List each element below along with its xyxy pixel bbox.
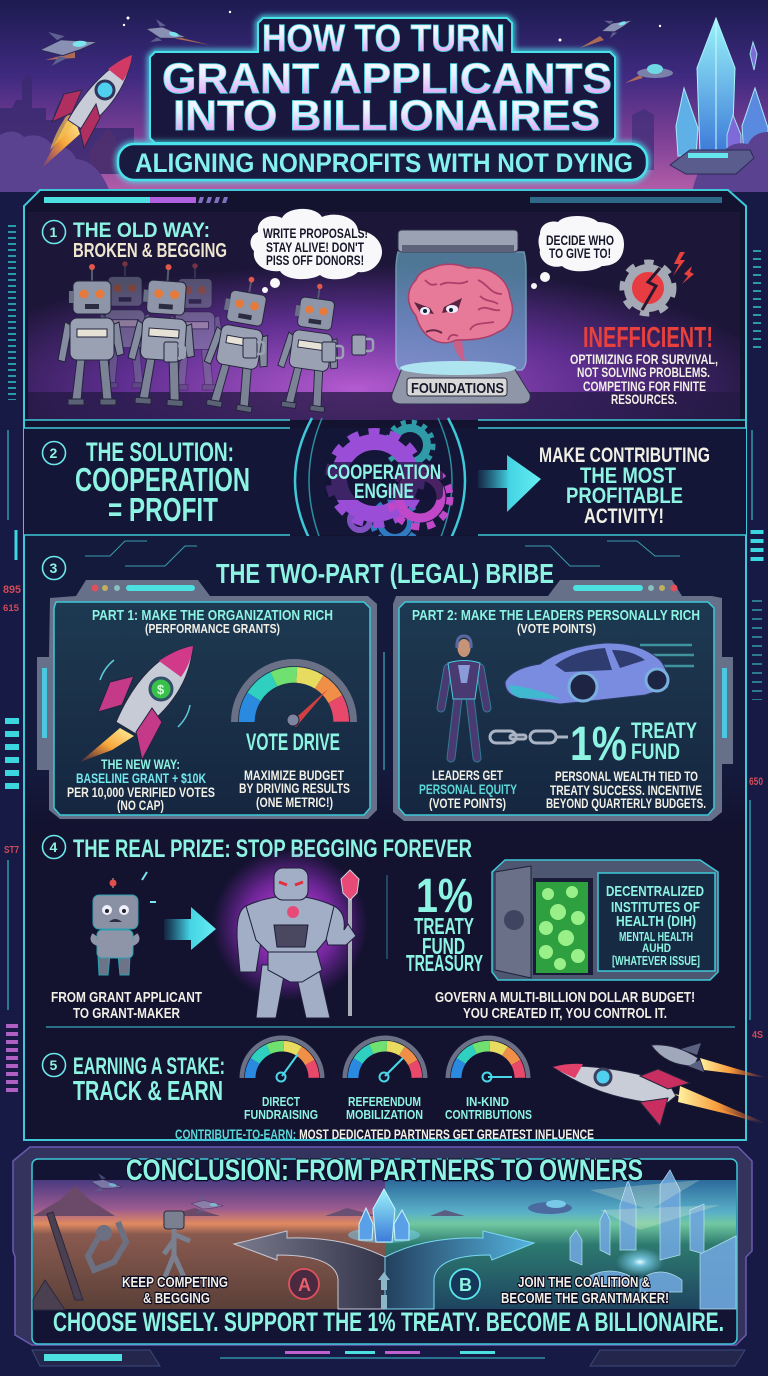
heading: the old way: THE OLD WAY:: [73, 219, 210, 242]
heading: track and earn: EARNING A STAKE:: [73, 1053, 225, 1080]
panel: section 4 real prize: [42, 835, 718, 1022]
header scene: sky, city, ships, crystals: [0, 0, 768, 192]
heading: two-part legal bribe: 3: [50, 560, 58, 576]
title: [150, 18, 615, 143]
heading: track and earn: [42, 1053, 225, 1106]
icon: open safe with money: [WHATEVER ISSUE]: [612, 954, 700, 968]
chart: in-kind contributions gauge: IN-KIND: [466, 1094, 509, 1109]
text: make contributing: THE MOST: [580, 463, 676, 488]
cloud right: [692, 132, 768, 192]
side HUD decorations: 650: [749, 776, 763, 788]
text: personal wealth: [546, 768, 706, 811]
text: maximize budget: [239, 767, 350, 810]
panel: section 1 the old way: [24, 209, 746, 420]
text: govern a budget: [435, 990, 695, 1022]
text: contribute to earn: CONTRIBUTE-TO-EARN: MOST DEDICATED PARTNERS GET GREATEST INFLUENCE: [175, 1126, 594, 1142]
chart: in-kind contributions gauge: [445, 1038, 532, 1122]
heading: stop begging: 4: [50, 839, 58, 855]
text: keep competing: [122, 1274, 228, 1307]
chart: direct fundraising gauge: FUNDRAISING: [244, 1107, 318, 1122]
arrow: path B right: [385, 1231, 534, 1309]
thought bubble: decide who to give to: DECIDE WHO: [546, 232, 614, 248]
heading: the old way: [42, 219, 227, 262]
side HUD decorations: 4S: [752, 1030, 763, 1041]
panel: section 4 real prize: TO GRANT-MAKER: [73, 1006, 180, 1022]
icon: open safe with money: MENTAL HEALTH: [619, 930, 693, 944]
arrow: to most profitable: [478, 455, 541, 512]
text: join the coalition: [501, 1274, 669, 1307]
heading: two-part legal bribe: THE TWO-PART (LEGAL) BRIBE: [216, 558, 554, 589]
chart: referendum mobilization gauge: REFERENDUM: [348, 1094, 421, 1109]
panel: section 3 bribe: [25, 536, 745, 830]
panel: part 1 organization: PART 1: MAKE THE ORGANIZATION RICH: [92, 607, 333, 624]
stat: 1% treaty fund treasury: TREATY: [414, 913, 474, 939]
chart: referendum mobilization gauge: MOBILIZATION: [346, 1107, 423, 1122]
text: join the coalition: BECOME THE GRANTMAKER!: [501, 1290, 669, 1307]
icon: broken gear: [623, 252, 694, 313]
side HUD decorations: 615: [3, 603, 19, 613]
badge: B: [450, 1269, 480, 1299]
icon: open safe with money: INSTITUTES OF: [611, 899, 700, 916]
main frame panel: [24, 190, 746, 1140]
panel: part 1 organization: (PERFORMANCE GRANTS): [145, 621, 280, 636]
icon: header rocket: [42, 55, 132, 168]
text: personal wealth: PERSONAL WEALTH TIED TO: [555, 768, 698, 784]
center road marker: [378, 1272, 390, 1309]
title: INTO BILLIONAIRES: [173, 92, 600, 140]
icon: worried small robot: [93, 872, 156, 975]
icon: dollar rocket: $: [157, 682, 165, 697]
title: HOW TO TURN: [262, 18, 505, 60]
icon: cooperation engine gears: COOPERATION: [327, 461, 441, 484]
footer HUD bars: [32, 1350, 745, 1366]
text: make contributing: MAKE CONTRIBUTING: [539, 444, 710, 467]
chart: vote drive gauge: [234, 662, 354, 756]
stat: 1% treaty fund treasury: [406, 870, 483, 976]
chart: vote drive gauge: VOTE DRIVE: [246, 729, 340, 756]
badge: B: B: [459, 1275, 472, 1295]
brain: [408, 264, 512, 368]
subtitle pill: ALIGNING NONPROFITS WITH NOT DYING: [135, 148, 633, 178]
text: maximize budget: (ONE METRIC!): [256, 794, 333, 810]
icon: cooperation engine gears: ENGINE: [354, 480, 414, 503]
thought bubble: write proposals: PISS OFF DONORS!: [266, 252, 364, 268]
thought bubble: write proposals: STAY ALIVE! DON'T: [266, 239, 364, 255]
chart: direct fundraising gauge: [242, 1038, 322, 1122]
heading: cooperation equals profit: COOPERATION: [75, 461, 250, 498]
chart: referendum mobilization gauge: [345, 1038, 425, 1122]
panel: conclusion: [13, 1147, 752, 1345]
stat: 1% treaty fund treasury: FUND: [422, 933, 465, 959]
thought bubble: write proposals: WRITE PROPOSALS!: [263, 225, 368, 241]
text: govern a budget: YOU CREATED IT, YOU CONTROL IT.: [463, 1006, 667, 1022]
heading: cooperation equals profit: THE SOLUTION:: [86, 437, 234, 467]
badge: A: [289, 1269, 319, 1299]
panel: part 1 organization: [37, 580, 384, 819]
stat: 1% treaty fund: FUND: [631, 739, 680, 764]
jar with brain: foundations: [392, 230, 530, 404]
thought bubble: decide who to give to: [531, 216, 624, 289]
callout: inefficient: NOT SOLVING PROBLEMS.: [577, 364, 710, 380]
callout: inefficient: RESOURCES.: [611, 391, 677, 407]
text: maximize budget: BY DRIVING RESULTS: [239, 780, 350, 796]
icon: open safe with money: [492, 860, 718, 980]
text: leaders get equity: (VOTE POINTS): [429, 795, 506, 811]
callout: inefficient: [570, 322, 718, 407]
panel: part 2 leaders: (VOTE POINTS): [517, 621, 596, 636]
icon: dollar rocket: [80, 646, 193, 762]
icon: sports car: [505, 643, 694, 704]
chart: in-kind contributions gauge: CONTRIBUTIONS: [445, 1107, 532, 1122]
city: [570, 1170, 736, 1309]
heading: two-part legal bribe: [42, 556, 554, 589]
stat: 1% treaty fund: 1%: [570, 718, 627, 771]
text: keep competing: KEEP COMPETING: [122, 1274, 228, 1291]
side HUD decorations: [3, 225, 763, 1096]
text: leaders get equity: [419, 767, 517, 811]
icon: powerful robot with staff: [212, 849, 368, 1018]
robots queue with mugs: [58, 261, 373, 414]
thought bubble: write proposals: [251, 209, 382, 293]
panel: part 2 leaders: PART 2: MAKE THE LEADERS PERSONALLY RICH: [412, 607, 700, 624]
jar with brain: foundations: FOUNDATIONS: [411, 380, 504, 397]
arrow: path A left: [234, 1231, 385, 1309]
arrow: applicant to grant-maker: [164, 907, 216, 950]
side HUD decorations: 895: [3, 584, 21, 596]
badge: A: A: [298, 1275, 311, 1295]
text: make contributing: ACTIVITY!: [584, 505, 664, 528]
text: the new way: PER 10,000 VERIFIED VOTES: [67, 784, 215, 800]
panel: part 2 leaders: [393, 580, 733, 821]
text: personal wealth: TREATY SUCCESS. INCENTIVE: [550, 782, 702, 798]
heading: the old way: 1: [50, 224, 58, 240]
text: the new way: [67, 756, 215, 813]
cloud left: [0, 131, 110, 192]
icon: open safe with money: DECENTRALIZED: [606, 883, 704, 900]
text: maximize budget: MAXIMIZE BUDGET: [244, 767, 344, 783]
text: the new way: (NO CAP): [117, 797, 164, 813]
text: the new way: BASELINE GRANT + $10K: [76, 770, 206, 786]
heading: cooperation equals profit: 2: [50, 445, 58, 461]
text: make contributing: [539, 444, 710, 528]
heading: cooperation equals profit: = PROFIT: [108, 491, 218, 528]
text: leaders get equity: PERSONAL EQUITY: [419, 781, 517, 797]
side HUD decorations: ST7: [4, 845, 19, 856]
title: GRANT APPLICANTS: [162, 55, 612, 103]
text: the new way: THE NEW WAY:: [101, 756, 180, 772]
icon: leader in suit: [441, 636, 487, 758]
icon: open safe with money: AUHD: [642, 941, 671, 955]
callout: inefficient: INEFFICIENT!: [583, 322, 713, 354]
panel: section 2 the solution: [24, 418, 746, 544]
text: leaders get equity: LEADERS GET: [432, 767, 503, 783]
icon: cooperation engine gears: [295, 418, 465, 544]
callout: inefficient: OPTIMIZING FOR SURVIVAL,: [570, 351, 718, 367]
stat: 1% treaty fund treasury: TREASURY: [406, 950, 483, 976]
heading: cooperation equals profit: [42, 437, 250, 528]
panel: section 5 earning a stake: [42, 1038, 768, 1142]
chart: direct fundraising gauge: DIRECT: [262, 1094, 300, 1109]
conclusion scene: wasteland and city: [33, 1170, 736, 1310]
broken robots: [88, 1211, 190, 1277]
heading: the old way: BROKEN & BEGGING: [73, 240, 227, 262]
text: personal wealth: BEYOND QUARTERLY BUDGETS.: [546, 795, 706, 811]
text: keep competing: & BEGGING: [143, 1290, 210, 1307]
thought bubble: decide who to give to: TO GIVE TO!: [549, 245, 611, 261]
heading: track and earn: 5: [50, 1057, 58, 1073]
icon: open safe with money: HEALTH (DIH): [616, 913, 696, 930]
icon: flying rockets: [553, 1043, 768, 1126]
crystal: [348, 1189, 420, 1243]
panel: section 4 real prize: FROM GRANT APPLICANT: [51, 990, 202, 1006]
text: make contributing: PROFITABLE: [566, 483, 683, 508]
heading: stop begging: [42, 835, 472, 863]
icon: chain links: [490, 731, 568, 743]
stat: 1% treaty fund: TREATY: [631, 718, 697, 743]
callout: inefficient: COMPETING FOR FINITE: [583, 378, 706, 394]
text: govern a budget: GOVERN A MULTI-BILLION DOLLAR BUDGET!: [435, 990, 695, 1006]
stat: 1% treaty fund: [570, 718, 697, 771]
heading: stop begging: THE REAL PRIZE: STOP BEGGING FOREVER: [73, 835, 472, 863]
heading: track and earn: TRACK & EARN: [73, 1075, 223, 1106]
text: join the coalition: JOIN THE COALITION &: [518, 1274, 650, 1291]
stat: 1% treaty fund treasury: 1%: [416, 870, 473, 923]
